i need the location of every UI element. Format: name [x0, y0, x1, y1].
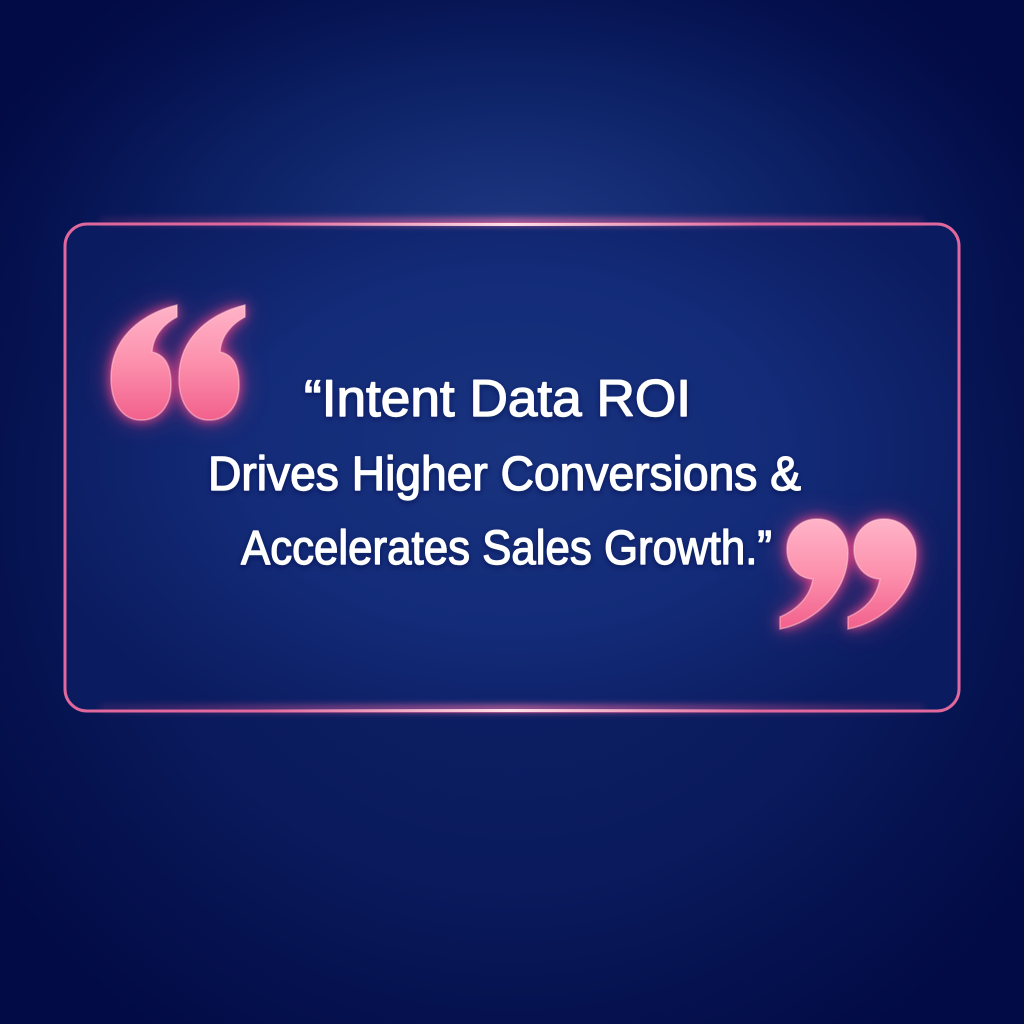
icon: opening quotation mark — [111, 305, 245, 420]
quote line 1: “Intent Data ROI — [304, 370, 691, 428]
icon: closing quotation mark — [780, 519, 916, 629]
panel: quote frame — [65, 218, 959, 712]
quote text — [208, 370, 801, 575]
quote line 2: Drives Higher Conversions & — [208, 448, 801, 501]
quote line 3: Accelerates Sales Growth.” — [241, 522, 772, 575]
